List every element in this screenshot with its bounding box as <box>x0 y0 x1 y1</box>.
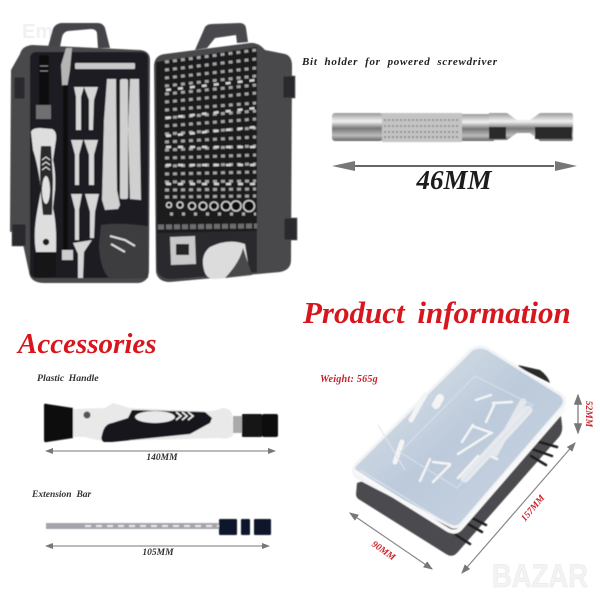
caption: Extension Bar: Extension Bar <box>31 490 92 500</box>
knurled grip <box>382 113 462 142</box>
latches <box>456 441 557 544</box>
suction cup <box>99 224 148 279</box>
screwdriver <box>31 55 56 278</box>
bit rows <box>165 50 256 197</box>
dimension arrow: 90MM <box>350 513 432 569</box>
dimension arrow: 52MM <box>577 395 579 433</box>
extension bar image <box>46 519 271 535</box>
lid outline <box>354 408 565 532</box>
hex sockets <box>166 200 254 212</box>
closed case with transparent lid <box>354 347 565 556</box>
wrenches <box>71 87 99 278</box>
bit holder image <box>332 113 573 142</box>
short bit row <box>158 226 257 227</box>
plastic handle image <box>44 403 278 442</box>
label: 90MM: 90MM <box>369 540 397 563</box>
label: 105MM: 105MM <box>142 548 174 558</box>
heading: Product information: Product information <box>302 295 571 330</box>
heading: Accessories: Accessories <box>16 328 157 360</box>
dimension arrow: 157MM <box>462 443 575 573</box>
compartment tools <box>157 231 257 279</box>
dimension arrow: 46MM <box>332 161 577 171</box>
label: 140MM: 140MM <box>146 453 178 463</box>
label: 52MM: 52MM <box>583 401 593 428</box>
lid contents <box>360 376 533 525</box>
extension bar <box>61 48 73 260</box>
watermark: Emo: Emo <box>22 21 65 43</box>
caption: bit holder: Bit holder for powered screwdriver <box>301 56 498 68</box>
right case half <box>154 23 297 282</box>
bit holder in case <box>75 63 135 69</box>
open toolkit case <box>10 23 297 283</box>
dimension arrow: 105MM <box>46 545 269 547</box>
socket labels <box>170 212 256 216</box>
case base <box>356 416 562 556</box>
pry tools <box>102 79 141 210</box>
caption: Plastic Handle: Plastic Handle <box>37 373 99 384</box>
dimension arrow: 140MM <box>46 450 275 452</box>
label: 157MM: 157MM <box>520 493 548 524</box>
label: 46MM: 46MM <box>415 165 492 195</box>
left case half <box>10 23 150 283</box>
handle <box>518 365 550 383</box>
label: weight: Weight: 565g <box>320 374 378 385</box>
clear lid <box>354 347 564 527</box>
